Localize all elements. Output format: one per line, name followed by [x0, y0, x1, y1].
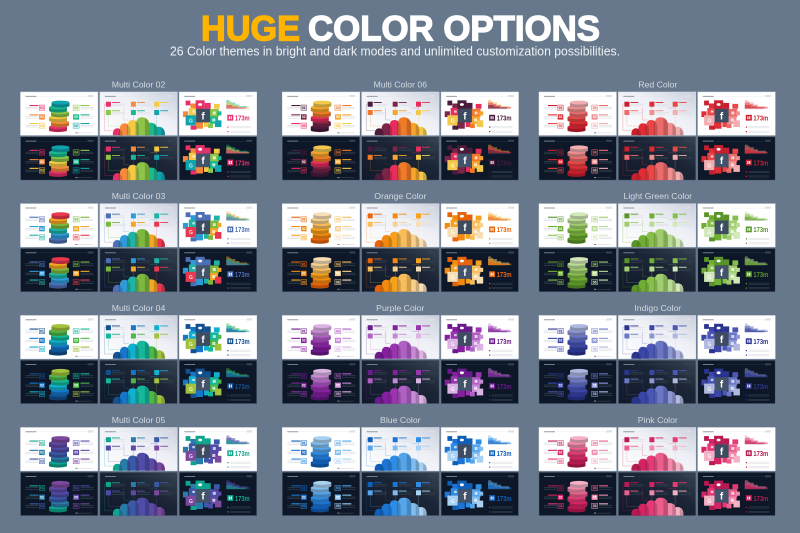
slide: dark social cluster: [441, 137, 518, 180]
slide: bright hill: [618, 92, 696, 135]
slide: dark disc stack: [282, 248, 360, 292]
theme label: Multi Color 03: [112, 191, 165, 201]
panel: Pink Color: [539, 415, 775, 516]
slide: dark hill: [100, 137, 177, 180]
slide: dark social cluster: [179, 360, 257, 404]
slide: dark social cluster: [698, 137, 775, 180]
slide: bright disc stack: [539, 204, 616, 247]
panel: Multi Color 06: [282, 80, 518, 180]
slide: dark hill: [100, 360, 177, 404]
slide: bright hill: [618, 316, 696, 359]
panel: Multi Color 03: [20, 191, 257, 292]
slide: bright disc stack: [282, 92, 360, 135]
theme label: Multi Color 05: [112, 415, 165, 425]
panel: Multi Color 05: [20, 415, 257, 516]
slide: dark hill: [618, 472, 696, 516]
slide: dark hill: [362, 137, 439, 180]
slide: bright social cluster: [698, 204, 775, 247]
slide: dark disc stack: [20, 248, 98, 292]
theme label: Multi Color 02: [112, 80, 165, 90]
slide: dark hill: [362, 360, 439, 404]
slide: dark disc stack: [539, 472, 616, 516]
slide: bright social cluster: [441, 204, 518, 247]
slide: bright hill: [362, 204, 439, 247]
slide: dark disc stack: [20, 360, 98, 404]
theme label: Pink Color: [638, 415, 678, 425]
slide: dark social cluster: [698, 248, 775, 292]
theme label: Red Color: [638, 80, 677, 90]
slide: bright disc stack: [20, 316, 98, 359]
theme label: Multi Color 06: [374, 80, 427, 90]
slide: dark hill: [100, 248, 177, 292]
slide: dark social cluster: [179, 137, 257, 180]
slide: dark social cluster: [698, 472, 775, 516]
panel: Orange Color: [282, 191, 518, 292]
slide: bright disc stack: [539, 316, 616, 359]
slide: bright social cluster: [179, 92, 257, 135]
slide: dark disc stack: [282, 472, 360, 516]
slide: bright hill: [100, 204, 177, 247]
slide: dark disc stack: [539, 137, 616, 180]
slide: bright hill: [362, 316, 439, 359]
slide: bright social cluster: [698, 92, 775, 135]
title: HUGE: [201, 9, 300, 48]
panel: Indigo Color: [539, 303, 775, 404]
slide: dark disc stack: [20, 137, 98, 180]
slide: dark hill: [100, 472, 177, 516]
slide: bright disc stack: [282, 316, 360, 359]
slide: dark disc stack: [539, 360, 616, 404]
slide: bright disc stack: [20, 92, 98, 135]
slide: bright hill: [362, 428, 439, 471]
slide: bright hill: [618, 204, 696, 247]
theme label: Blue Color: [380, 415, 421, 425]
slide: bright disc stack: [282, 428, 360, 471]
slide: dark hill: [362, 472, 439, 516]
slide: dark social cluster: [179, 248, 257, 292]
panel: Red Color: [539, 80, 775, 180]
slide: dark hill: [618, 360, 696, 404]
slide: bright social cluster: [179, 428, 257, 471]
slide: dark disc stack: [20, 472, 98, 516]
slide: bright hill: [362, 92, 439, 135]
panel: Multi Color 02: [20, 80, 257, 180]
slide: bright social cluster: [179, 316, 257, 359]
slide: dark disc stack: [539, 248, 616, 292]
slide: bright social cluster: [441, 92, 518, 135]
slide: dark disc stack: [282, 137, 360, 180]
slide: bright hill: [618, 428, 696, 471]
slide: bright disc stack: [282, 204, 360, 247]
slide: dark social cluster: [441, 248, 518, 292]
theme label: Indigo Color: [634, 303, 681, 313]
slide: dark hill: [362, 248, 439, 292]
slide: dark disc stack: [282, 360, 360, 404]
slide: dark hill: [618, 137, 696, 180]
slide: dark social cluster: [441, 360, 518, 404]
slide: dark social cluster: [698, 360, 775, 404]
slide: bright social cluster: [179, 204, 257, 247]
theme label: Light Green Color: [624, 191, 692, 201]
slide: bright social cluster: [441, 428, 518, 471]
slide: bright hill: [100, 428, 177, 471]
theme label: Orange Color: [374, 191, 426, 201]
slide: bright social cluster: [698, 316, 775, 359]
slide: bright disc stack: [20, 204, 98, 247]
slide: dark social cluster: [179, 472, 257, 516]
slide: bright hill: [100, 316, 177, 359]
panel: Multi Color 04: [20, 303, 257, 404]
slide: bright social cluster: [441, 316, 518, 359]
subtitle: 26 Color themes in bright and dark modes and unlimited customization possibilities.: [170, 43, 620, 58]
panel: Purple Color: [282, 303, 518, 404]
slide: dark social cluster: [441, 472, 518, 516]
theme label: Multi Color 04: [112, 303, 165, 313]
slide: bright hill: [100, 92, 177, 135]
panel: Blue Color: [282, 415, 518, 516]
slide: bright disc stack: [20, 428, 98, 471]
slide: bright social cluster: [698, 428, 775, 471]
slide: bright disc stack: [539, 92, 616, 135]
slide: dark hill: [618, 248, 696, 292]
title: color options: COLOR OPTIONS: [308, 9, 600, 48]
panel: Light Green Color: [539, 191, 775, 292]
slide: bright disc stack: [539, 428, 616, 471]
theme label: Purple Color: [376, 303, 425, 313]
